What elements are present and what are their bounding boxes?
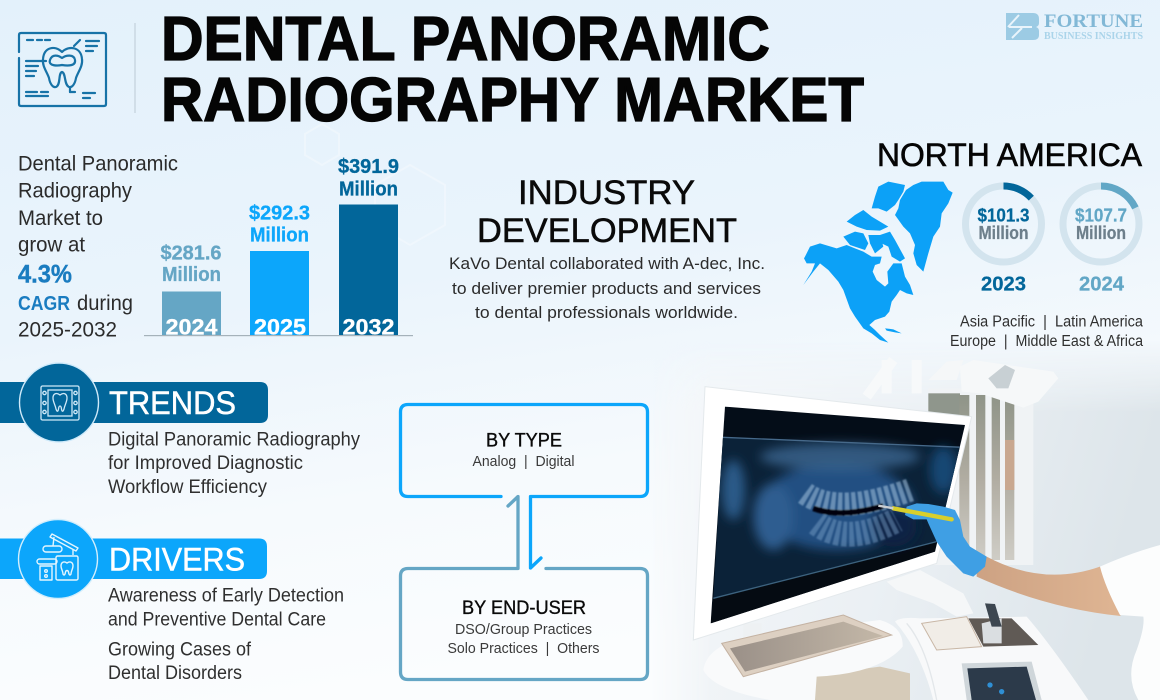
bar 2032: 2032 bbox=[342, 314, 394, 340]
text block: market growth: 2025-2032 bbox=[18, 318, 117, 342]
donut chart: 2023: $101.3 bbox=[978, 206, 1030, 226]
chart axis bbox=[144, 335, 413, 336]
heading: industry development: DEVELOPMENT bbox=[477, 212, 737, 250]
text block: market growth: Dental Panoramic bbox=[18, 152, 178, 176]
text block: industry development: KaVo Dental collaborated with A-dec, Inc. bbox=[449, 254, 765, 273]
panel: by end-user bbox=[400, 496, 648, 680]
by end-user items: DSO/Group Practices bbox=[455, 621, 592, 638]
trends text: Digital Panoramic Radiography bbox=[108, 430, 360, 450]
heading: industry development: INDUSTRY bbox=[518, 174, 695, 212]
text block: market growth bbox=[18, 152, 178, 342]
text block: industry development: to dental professionals worldwide. bbox=[475, 303, 738, 322]
monitor stand bbox=[743, 623, 762, 663]
tray bbox=[722, 615, 892, 677]
arm bbox=[977, 557, 1121, 616]
text block: other regions: Europe | Middle East & Africa bbox=[950, 333, 1143, 350]
donut chart: 2023: 2023 bbox=[981, 274, 1026, 296]
drivers text: and Preventive Dental Care bbox=[108, 610, 326, 630]
text block: market growth: grow at bbox=[18, 234, 85, 256]
map: Greenland bbox=[895, 182, 953, 272]
pen bbox=[878, 506, 952, 519]
title: DENTAL PANORAMIC bbox=[161, 5, 770, 74]
text block: other regions bbox=[950, 314, 1143, 350]
drivers text: Awareness of Early Detection bbox=[108, 586, 344, 606]
panel: by type bbox=[400, 404, 648, 568]
donut chart: 2024: $107.7 bbox=[1075, 206, 1127, 226]
by end-user items bbox=[448, 621, 600, 657]
logo: Fortune Business Insights bbox=[1006, 12, 1143, 42]
divider bbox=[134, 23, 136, 113]
floor bbox=[815, 667, 910, 700]
text block: industry development bbox=[449, 254, 765, 322]
text block: industry development: to deliver premier products and services bbox=[452, 279, 761, 298]
bar 2025: 2025 bbox=[254, 314, 306, 340]
map: Arctic islands bbox=[843, 182, 905, 262]
photo: dentist pointing at panoramic x-ray on monitor bbox=[693, 360, 1160, 700]
photo wall bbox=[697, 365, 1160, 700]
bar 2024: $281.6 bbox=[160, 242, 222, 264]
trends banner bbox=[0, 382, 268, 423]
map: North America bbox=[803, 182, 953, 343]
bar 2024: Million bbox=[162, 264, 221, 286]
donut chart: 2023 bbox=[966, 186, 1042, 296]
by type heading: BY TYPE bbox=[486, 430, 562, 452]
bar 2025: $292.3 bbox=[249, 202, 310, 224]
donut chart: 2024: 2024 bbox=[1079, 274, 1125, 296]
trends text: for Improved Diagnostic bbox=[108, 453, 303, 474]
text block: market growth: Market to bbox=[18, 207, 103, 230]
map: Cuba bbox=[885, 328, 902, 333]
icon: tooth film bbox=[20, 363, 98, 442]
box outline with up arrow bbox=[400, 496, 648, 680]
text block: other regions: Asia Pacific | Latin America bbox=[960, 314, 1143, 330]
icon: tooth x-ray panel bbox=[19, 33, 106, 106]
bar 2024 bbox=[160, 242, 222, 340]
bar chart: market size bbox=[144, 156, 413, 340]
logo: Fortune Business Insights: BUSINESS INSIGHTS bbox=[1044, 31, 1143, 42]
text block: market growth: CAGR bbox=[18, 293, 70, 315]
drivers banner bbox=[0, 538, 267, 579]
window with blinds bbox=[928, 388, 1033, 565]
by end-user heading: BY END-USER bbox=[462, 598, 586, 619]
trends heading: TRENDS bbox=[109, 385, 236, 421]
donut chart: 2024: Million bbox=[1076, 223, 1126, 243]
bar 2032: Million bbox=[339, 178, 398, 200]
box outline with down arrow bbox=[400, 404, 648, 568]
by end-user items: Solo Practices | Others bbox=[448, 640, 600, 657]
bar 2024: 2024 bbox=[166, 314, 218, 340]
bar 2032: $391.9 bbox=[338, 156, 399, 178]
glove bbox=[905, 503, 987, 577]
bar 2032 bbox=[338, 156, 399, 340]
monitor arm bbox=[887, 570, 973, 617]
x-ray teeth bbox=[805, 490, 910, 534]
text block: market growth: 4.3% bbox=[18, 260, 72, 288]
title bbox=[161, 5, 864, 135]
x-ray jaw image bbox=[722, 443, 957, 550]
ceiling lamp bbox=[928, 360, 1058, 408]
icon: dental x-ray unit bbox=[18, 520, 98, 598]
trends text bbox=[108, 430, 360, 498]
text block: market growth: during bbox=[77, 292, 133, 315]
panel: trends bbox=[0, 363, 360, 498]
heading: industry development bbox=[477, 174, 737, 250]
logo mark bbox=[1006, 13, 1039, 40]
background hexagon pattern bbox=[305, 124, 445, 245]
wall columns above monitor bbox=[867, 360, 917, 397]
console bbox=[895, 603, 1088, 700]
map: mainland bbox=[803, 243, 913, 343]
donut chart: 2023: Million bbox=[978, 223, 1028, 243]
drivers heading: DRIVERS bbox=[109, 542, 245, 578]
title: RADIOGRAPHY MARKET bbox=[161, 66, 864, 135]
bar 2025 bbox=[249, 202, 310, 340]
monitor bezel bbox=[693, 387, 972, 640]
trends text: Workflow Efficiency bbox=[108, 477, 267, 498]
drivers text: Dental Disorders bbox=[108, 663, 242, 684]
heading: north america: NORTH AMERICA bbox=[877, 137, 1143, 173]
monitor screen bbox=[710, 406, 965, 624]
text block: market growth: Radiography bbox=[18, 180, 132, 202]
donut chart: 2024 bbox=[1063, 186, 1139, 296]
logo: Fortune Business Insights: FORTUNE bbox=[1044, 12, 1143, 32]
bar 2025: Million bbox=[250, 224, 309, 246]
drivers text bbox=[108, 586, 344, 684]
drivers text: Growing Cases of bbox=[108, 640, 252, 660]
panel: drivers bbox=[0, 520, 344, 684]
by type items: Analog | Digital bbox=[472, 453, 574, 470]
sleeve and torso bbox=[1100, 545, 1160, 700]
sink bowl bbox=[703, 620, 903, 700]
